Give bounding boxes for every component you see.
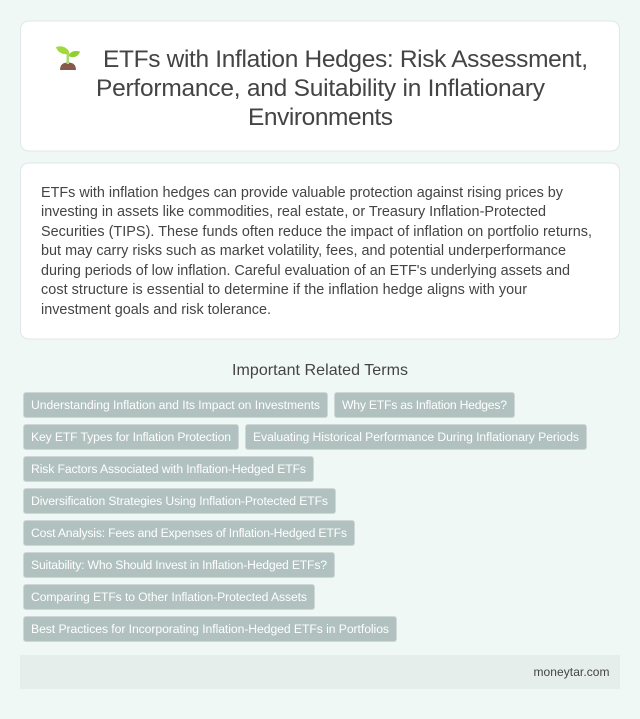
tag: diversification	[24, 488, 336, 514]
title: ETFs with Inflation Hedges: Risk Assessment,	[103, 46, 588, 73]
panel: title card	[20, 21, 620, 151]
panel: related term tags	[24, 392, 586, 642]
tag: understanding inflation: Understanding Inflation and Its Impact on Investments	[31, 398, 320, 412]
text block: summary paragraph: during periods of low inflation. Careful evaluation of an ETF's underlying assets and	[41, 263, 570, 279]
text block: summary paragraph: Securities (TIPS). These funds often reduce the impact of inflation on portfolio returns,	[41, 224, 592, 240]
tag: why ETFs: Why ETFs as Inflation Hedges?	[342, 398, 507, 412]
tag: comparing ETFs: Comparing ETFs to Other Inflation-Protected Assets	[31, 590, 307, 604]
tag: diversification: Diversification Strategies Using Inflation-Protected ETFs	[31, 494, 328, 508]
text block: summary paragraph	[41, 185, 592, 318]
text block: summary paragraph: investment goals and risk tolerance.	[41, 302, 271, 318]
tag: risk factors: Risk Factors Associated with Inflation-Hedged ETFs	[31, 462, 306, 476]
footer: site name: moneytar.com	[534, 665, 610, 679]
tag: why ETFs	[334, 392, 514, 418]
tag: cost analysis	[24, 520, 354, 546]
tag: comparing ETFs	[24, 584, 314, 610]
tag: best practices: Best Practices for Incorporating Inflation-Hedged ETFs in Portfolios	[31, 622, 389, 636]
tag: best practices	[24, 616, 396, 642]
text block: summary paragraph: ETFs with inflation hedges can provide valuable protection against rising prices by	[41, 185, 564, 201]
tag: cost analysis: Cost Analysis: Fees and Expenses of Inflation-Hedged ETFs	[31, 526, 347, 540]
text block: summary paragraph: investing in assets like commodities, real estate, or Treasury Inflation-Protected	[41, 204, 546, 220]
tag: historical performance: Evaluating Historical Performance During Inflationary Periods	[253, 430, 579, 444]
tag: key ETF types	[24, 424, 238, 450]
footer bar	[20, 655, 620, 689]
icon: seedling	[56, 46, 80, 70]
tag: risk factors	[24, 456, 314, 482]
text block: summary paragraph: cost structure is essential to determine if the inflation hedge aligns with your	[41, 282, 527, 298]
tag: key ETF types: Key ETF Types for Inflation Protection	[31, 430, 231, 444]
title: Performance, and Suitability in Inflationary	[96, 75, 546, 102]
title: Environments	[248, 104, 393, 131]
tag: suitability	[24, 552, 334, 578]
text block: summary paragraph: but may carry risks such as market volatility, fees, and potential underperformance	[41, 243, 566, 259]
panel: summary card	[20, 163, 620, 339]
heading: important related terms: Important Related Terms	[232, 362, 408, 379]
tag: understanding inflation	[24, 392, 328, 418]
title	[96, 46, 588, 131]
tag: historical performance	[246, 424, 586, 450]
tag: suitability: Suitability: Who Should Invest in Inflation-Hedged ETFs?	[31, 558, 327, 572]
